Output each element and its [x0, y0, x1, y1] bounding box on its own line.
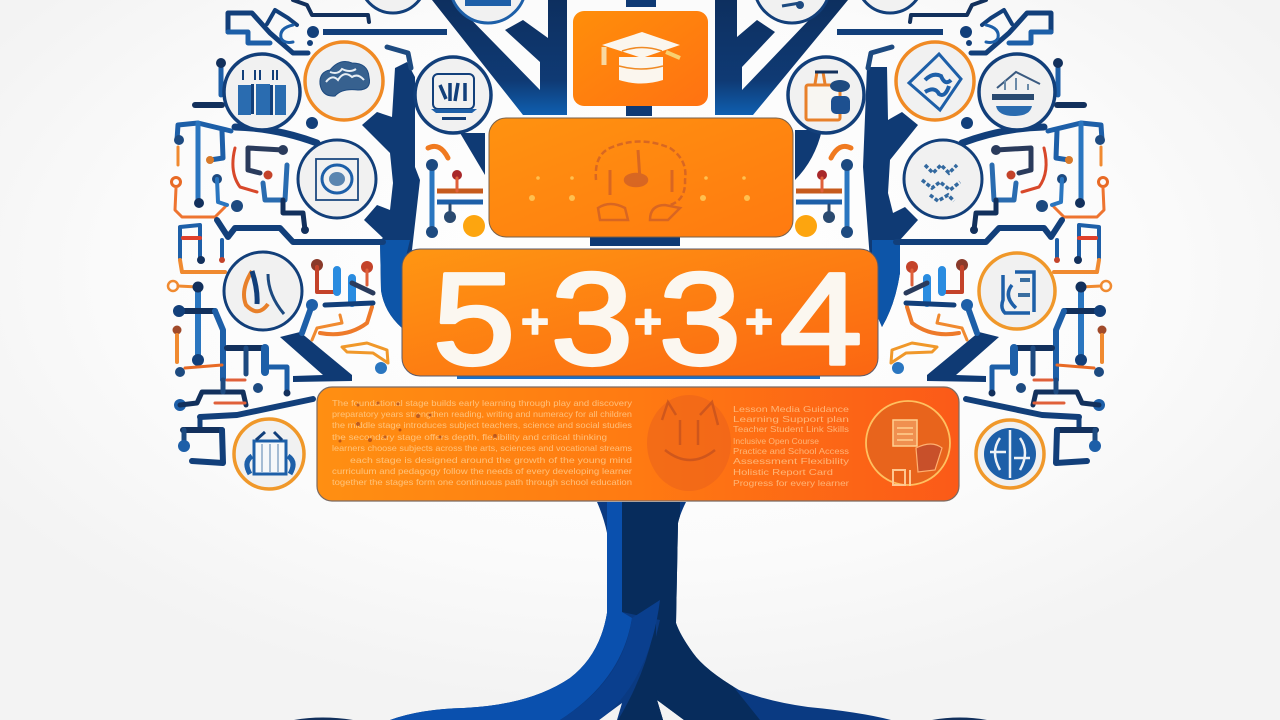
- panel: 5+3+3+4 box: [402, 245, 878, 392]
- icon: book stacks: [224, 54, 300, 130]
- heading: 5+3+3+4 numbers: 3: [551, 245, 633, 392]
- heading: 5+3+3+4 numbers: 3: [659, 245, 741, 392]
- icon: computer monitor: [415, 57, 491, 133]
- icon: diamond map: [896, 42, 974, 120]
- text block: left paragraph: each stage is designed around the growth of the young mind: [350, 455, 632, 465]
- faint speckles: [338, 402, 497, 442]
- icon: tongs: [224, 252, 302, 330]
- icon: ship: [979, 54, 1055, 130]
- text block: right paragraph: Inclusive Open Course: [733, 436, 819, 446]
- heading: 5+3+3+4 numbers: 4: [780, 245, 862, 392]
- icon: network: [904, 140, 982, 218]
- text block: right paragraph: Practice and School Access: [733, 446, 849, 456]
- far root tips: [294, 718, 987, 720]
- circuit pipes right: [796, 0, 1111, 463]
- icon circles left: [224, 0, 526, 489]
- emblem: faint central medallion: [647, 395, 731, 491]
- icon: brain: [305, 42, 383, 120]
- text block: left paragraph: preparatory years strengthen reading, writing and numeracy for all children: [332, 409, 632, 419]
- text block: left paragraph: The foundational stage builds early learning through play and discovery: [332, 398, 633, 408]
- icon: top partial circle 1: [360, 0, 426, 13]
- text block: right paragraph: Teacher Student Link Skills: [733, 424, 849, 434]
- heading: 5+3+3+4 numbers: [433, 245, 862, 392]
- icon: profile: [979, 253, 1055, 329]
- text block: right paragraph: Learning Support plan: [733, 414, 849, 424]
- text block: left paragraph: learners choose subjects across the arts, sciences and vocational streams: [332, 443, 632, 453]
- panel: second tier box: [489, 118, 793, 237]
- text block: right paragraph: Progress for every learner: [733, 478, 849, 488]
- faint sparkles: [529, 176, 750, 201]
- text block: left paragraph: the middle stage introduces subject teachers, science and social studies: [332, 420, 632, 430]
- tree branches: [323, 0, 990, 328]
- heading: 5+3+3+4 numbers: +: [521, 296, 549, 349]
- heading: 5+3+3+4 numbers: 5: [433, 245, 515, 392]
- icon: graduation cap: [602, 32, 680, 84]
- text block: right paragraph: Assessment Flexibility: [733, 456, 850, 466]
- text block: left paragraph: the secondary stage offers depth, flexibility and critical thinking: [332, 432, 607, 442]
- icon: framed cell: [298, 140, 376, 218]
- heading: 5+3+3+4 numbers: +: [634, 296, 662, 349]
- text block: right paragraph: [733, 404, 850, 488]
- accent dots: [463, 215, 817, 237]
- text block: left paragraph: [332, 398, 633, 487]
- text block: left paragraph: together the stages form one continuous path through school education: [332, 477, 632, 487]
- icon: top partial circle 3: [754, 0, 830, 23]
- icon: globe: [976, 420, 1044, 488]
- icon: case: [788, 57, 864, 133]
- icon: top partial circle 4: [857, 0, 923, 13]
- icon circles right: [754, 0, 1055, 488]
- text block: right paragraph: Holistic Report Card: [733, 467, 833, 477]
- panel: bottom text box: [317, 387, 959, 501]
- icon: head with document and fist: [866, 401, 950, 486]
- text block: left paragraph: curriculum and pedagogy follow the needs of every developing learner: [332, 466, 632, 476]
- heading: 5+3+3+4 numbers: +: [745, 296, 773, 349]
- icon: gate: [234, 419, 304, 489]
- tree trunk and roots: [380, 500, 900, 720]
- panel: graduation cap box: [573, 11, 708, 106]
- icon: faint head emblem: [596, 142, 685, 220]
- text block: right paragraph: Lesson Media Guidance: [733, 404, 849, 414]
- circuit pipes left: [168, 0, 483, 463]
- icon: top partial circle 2: [450, 0, 526, 23]
